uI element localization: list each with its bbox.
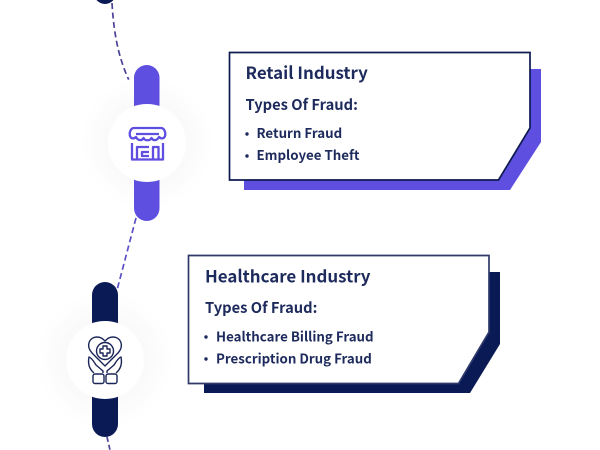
retail fraud list: Employee Theft bbox=[256, 145, 360, 164]
panel: healthcare industry bbox=[188, 256, 500, 393]
healthcare card bbox=[188, 256, 489, 384]
retail heading: Retail Industry bbox=[246, 59, 368, 84]
dashed connector: healthcare continuing down bbox=[107, 437, 110, 450]
healthcare fraud list bbox=[204, 326, 374, 368]
panel: retail industry bbox=[230, 52, 541, 190]
dashed connector: retail to healthcare bbox=[117, 218, 136, 290]
retail node circle bbox=[108, 104, 186, 182]
healthcare heading: Healthcare Industry bbox=[205, 262, 371, 288]
healthcare card shadow bbox=[204, 272, 500, 393]
retail fraud list bbox=[245, 123, 360, 164]
healthcare node circle bbox=[66, 321, 144, 399]
top node stub bbox=[94, 0, 116, 4]
retail fraud list: Return Fraud bbox=[256, 123, 342, 142]
icon: heart and caring hands bbox=[89, 337, 121, 384]
retail card bbox=[230, 52, 530, 180]
healthcare fraud list: Healthcare Billing Fraud bbox=[216, 326, 374, 346]
retail pill bbox=[134, 65, 160, 221]
retail timeline node bbox=[81, 65, 213, 221]
retail subheading: Types Of Fraud: bbox=[246, 94, 358, 115]
healthcare pill bbox=[92, 282, 118, 437]
retail card shadow bbox=[244, 69, 541, 190]
icon: storefront bbox=[130, 128, 165, 160]
healthcare node glow bbox=[37, 292, 173, 428]
dashed connector: top node to retail bbox=[112, 3, 134, 90]
healthcare timeline node bbox=[37, 282, 173, 437]
retail node glow bbox=[81, 77, 213, 209]
healthcare fraud list: Prescription Drug Fraud bbox=[216, 348, 372, 368]
healthcare subheading: Types Of Fraud: bbox=[205, 297, 317, 318]
